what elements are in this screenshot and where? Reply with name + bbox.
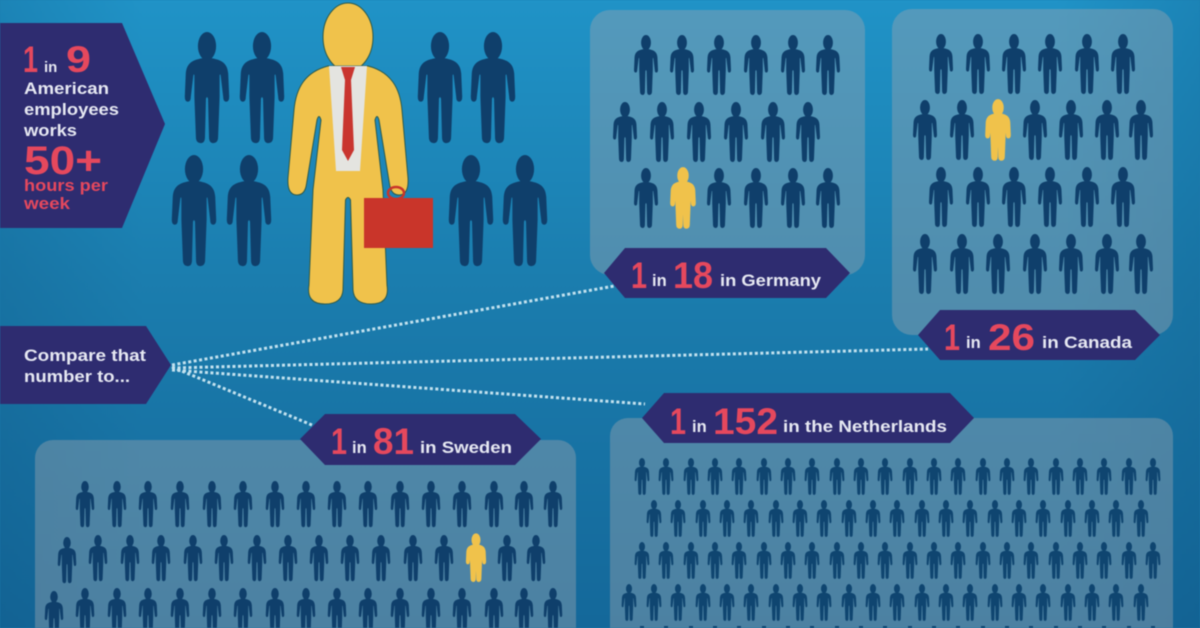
banner: 1 in 9 American employees <box>0 23 165 228</box>
banner: compare that number to: Compare that <box>24 347 147 365</box>
label: 1 in 152 in the Netherlands: in <box>692 418 707 436</box>
label: 1 in 152 in the Netherlands: 152 <box>713 401 778 442</box>
panel: Germany <box>590 10 865 275</box>
label: 1 in 26 in Canada: 26 <box>988 317 1035 358</box>
label: 1 in 26 in Canada: 1 <box>944 317 960 358</box>
banner: 1 in 9 American employees: 1 <box>23 39 38 80</box>
banner: 1 in 9 American employees: employees <box>24 101 119 119</box>
label: 1 in 81 in Sweden: in Sweden <box>420 439 512 457</box>
panel: Sweden <box>35 440 576 628</box>
panel: Canada <box>892 9 1173 335</box>
panel: Netherlands <box>610 418 1173 628</box>
label: 1 in 152 in the Netherlands: in the Netherlands <box>783 418 947 436</box>
label: 1 in 26 in Canada: in Canada <box>1042 334 1133 352</box>
banner: 1 in 9 American employees: hours per <box>24 177 109 195</box>
label: 1 in 152 in the Netherlands <box>642 393 974 443</box>
label: 1 in 81 in Sweden <box>300 414 541 465</box>
label: 1 in 18 in Germany <box>604 248 850 298</box>
label: 1 in 18 in Germany: in Germany <box>720 272 822 290</box>
label: 1 in 18 in Germany: 18 <box>673 255 713 296</box>
banner: 1 in 9 American employees: week <box>23 195 71 213</box>
group of dark figures beside the large man <box>172 32 547 266</box>
label: 1 in 81 in Sweden: in <box>352 439 367 457</box>
icon: large yellow businessman with briefcase <box>288 3 433 304</box>
label: 1 in 152 in the Netherlands: 1 <box>670 401 686 442</box>
banner: 1 in 9 American employees: in <box>44 59 57 76</box>
label: 1 in 81 in Sweden: 81 <box>373 421 414 462</box>
label: 1 in 18 in Germany: in <box>652 272 667 290</box>
label: 1 in 26 in Canada: in <box>966 334 981 352</box>
dotted connector lines <box>172 285 928 425</box>
banner: compare that number to <box>0 326 171 404</box>
label: 1 in 81 in Sweden: 1 <box>331 421 347 462</box>
label: 1 in 26 in Canada <box>918 310 1160 360</box>
banner: 1 in 9 American employees: 9 <box>66 39 91 80</box>
label: 1 in 18 in Germany: 1 <box>631 255 647 296</box>
banner: 1 in 9 American employees: works <box>23 122 77 140</box>
banner: 1 in 9 American employees: American <box>24 80 109 98</box>
banner: 1 in 9 American employees: 50+ <box>24 139 102 183</box>
banner: compare that number to: number to... <box>24 368 130 386</box>
